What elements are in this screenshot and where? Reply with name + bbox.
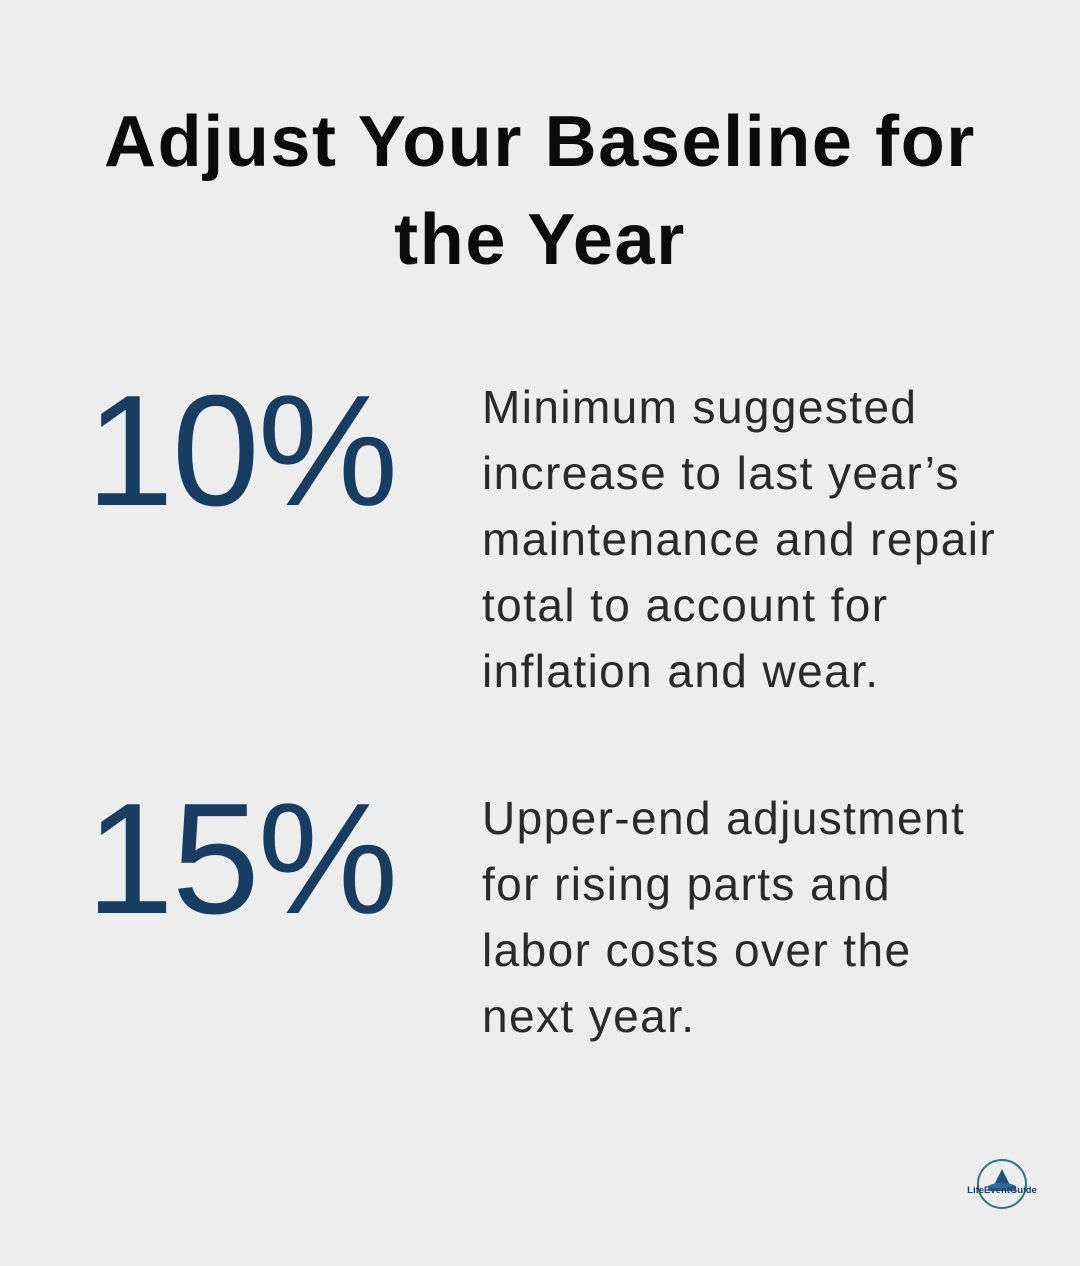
text: 10% description	[482, 381, 996, 697]
title	[104, 102, 976, 280]
stat: 10%: 10%	[86, 363, 396, 539]
text: 15% description: labor costs over the	[482, 924, 911, 976]
stat: 15%: 15%	[86, 771, 396, 947]
text: 15% description: next year.	[482, 990, 695, 1042]
title: the Year	[394, 200, 686, 280]
text: 10% description: total to account for	[482, 579, 888, 631]
text: 10% description: maintenance and repair	[482, 513, 996, 565]
logo: LifeEventGuide	[967, 1185, 1037, 1196]
text: 10% description: Minimum suggested	[482, 381, 917, 433]
text: 15% description: Upper-end adjustment	[482, 792, 965, 844]
text: 15% description	[482, 792, 965, 1042]
logo	[967, 1159, 1037, 1209]
text: 10% description: inflation and wear.	[482, 645, 879, 697]
text: 15% description: for rising parts and	[482, 858, 891, 910]
text: 10% description: increase to last year’s	[482, 447, 960, 499]
title: Adjust Your Baseline for	[104, 102, 976, 182]
